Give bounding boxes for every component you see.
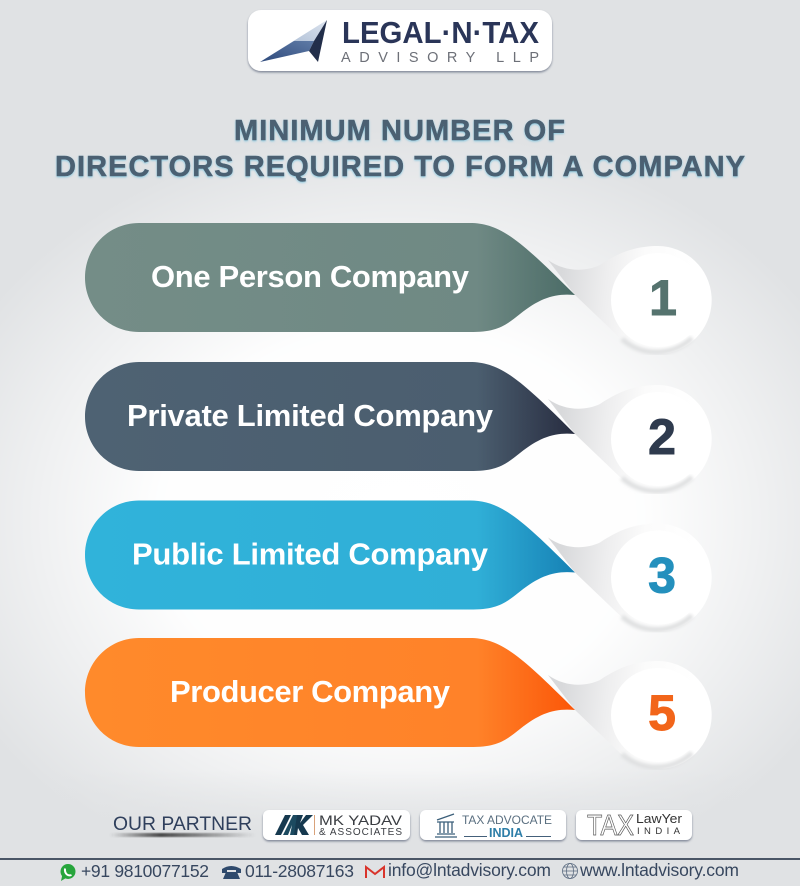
number: 3 — [648, 548, 676, 604]
partner: MK Yadav: & ASSOCIATES — [319, 827, 402, 838]
panel: Private Limited Company — [85, 362, 712, 492]
partner: Tax Lawyer India — [576, 810, 692, 842]
label: Producer Company — [170, 674, 451, 709]
banner — [85, 223, 575, 332]
panel: One Person Company — [85, 223, 712, 354]
panel: Public Limited Company — [85, 500, 712, 631]
contact: website: www.lntadvisory.com — [579, 860, 739, 880]
logo — [248, 10, 552, 71]
logo subtitle: ADVISORY LLP — [341, 50, 539, 66]
number: 1 — [649, 270, 677, 326]
label: Private Limited Company — [127, 398, 494, 433]
title: DIRECTORS REQUIRED TO FORM A COMPANY — [55, 151, 745, 183]
partner: Tax Lawyer India: INDIA — [637, 826, 681, 837]
contact: email: info@lntadvisory.com — [388, 860, 551, 880]
banner — [85, 638, 575, 747]
number: 2 — [648, 409, 676, 465]
partner: Tax Advocate India — [420, 810, 566, 840]
partner: MK Yadav: MK YADAV — [319, 813, 402, 828]
partner: MK Yadav — [263, 810, 410, 840]
contact: phone: 011-28087163 — [245, 861, 354, 881]
number: 5 — [648, 685, 676, 741]
icon: MK mark — [275, 815, 313, 835]
partner: Tax Advocate India: TAX ADVOCATE — [462, 813, 552, 827]
icon: pillars — [435, 814, 457, 837]
label: One Person Company — [151, 259, 470, 294]
banner — [85, 500, 575, 610]
banner — [85, 362, 575, 471]
title — [55, 115, 745, 183]
partner: Tax Lawyer India: TAX — [587, 810, 634, 842]
partner: Tax Advocate India: INDIA — [489, 826, 523, 840]
contact: whatsapp: +91 9810077152 — [81, 861, 209, 881]
logo wordmark: LEGAL·N·TAX — [342, 15, 539, 50]
label: Public Limited Company — [132, 536, 489, 572]
title: MINIMUM NUMBER OF — [234, 115, 565, 147]
icon: logo arrow — [260, 20, 327, 62]
panel: Producer Company — [85, 638, 712, 768]
partner: Tax Lawyer India: LawYer — [636, 812, 682, 826]
our partner heading: OUR PARTNER — [113, 814, 252, 835]
